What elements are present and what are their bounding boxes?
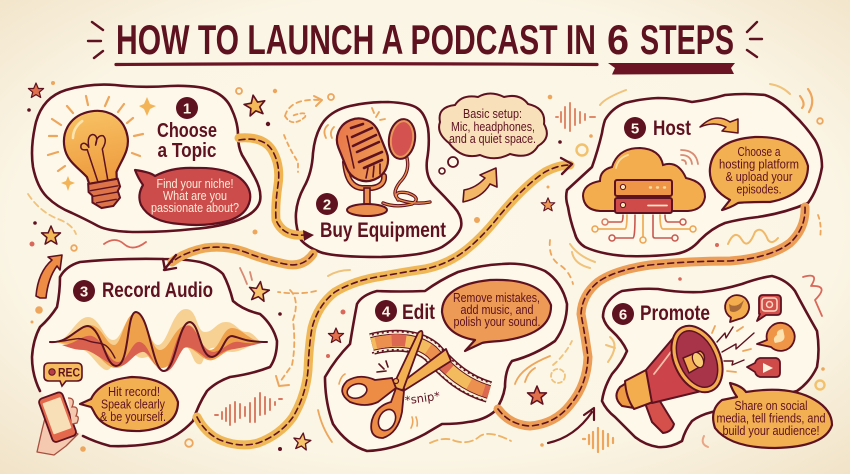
panel: step 6 promote xyxy=(612,295,832,448)
speech bubble: remove mistakes: add music, and xyxy=(460,303,534,317)
film strip xyxy=(372,332,491,401)
speech bubble: hit record: & be yourself. xyxy=(100,410,166,424)
icon: bird bubble xyxy=(725,295,749,322)
arrow: to thought bubble xyxy=(463,168,497,202)
heading: host: Host xyxy=(653,117,691,140)
panel 4 outline xyxy=(325,264,567,451)
title: STEPS xyxy=(640,16,734,63)
heading: promote: Promote xyxy=(640,302,710,325)
thought bubble: basic setup: and a quiet space. xyxy=(449,132,536,146)
panel: step 5 host xyxy=(583,117,808,243)
circuit lines xyxy=(607,215,681,238)
microphone cable xyxy=(383,158,430,206)
rec tag: REC xyxy=(58,366,80,380)
icon: hand holding phone xyxy=(37,391,78,455)
sound wave: below record audio xyxy=(215,393,282,425)
number badge 1: 1 xyxy=(183,100,191,118)
rays around bulb xyxy=(48,96,143,171)
number badge 4: 4 xyxy=(382,304,391,320)
rec tag xyxy=(44,363,82,386)
icon: megaphone xyxy=(616,318,733,433)
arrow: to host bubble xyxy=(700,118,738,133)
panel 3 outline xyxy=(32,259,277,446)
decorative stars and dots xyxy=(27,81,825,452)
icon: camera bubble xyxy=(757,295,781,321)
speech bubble: remove mistakes: Remove mistakes, xyxy=(453,291,540,305)
number badge 6 xyxy=(612,303,634,325)
heading: edit: Edit xyxy=(402,301,435,324)
thought bubble: basic setup: Mic, headphones, xyxy=(451,120,535,134)
number badge 6: 6 xyxy=(619,306,627,324)
speech bubble: remove mistakes: polish your sound. xyxy=(454,315,540,329)
speech bubble: hit record: Hit record! xyxy=(108,385,160,399)
title: 6 xyxy=(607,16,629,63)
number badge 3: 3 xyxy=(80,284,88,300)
speech bubble: find your niche: Find your niche! xyxy=(156,177,234,191)
speech bubble: choose a hosting platform: hosting platform xyxy=(719,158,799,172)
waveform xyxy=(50,309,267,372)
panel outlines xyxy=(32,85,822,451)
arrow: up to step 3 xyxy=(36,255,62,298)
number badge 5 xyxy=(624,117,646,139)
icon: light bulb xyxy=(59,106,139,213)
road: step 3 to step 5 xyxy=(197,158,572,445)
speech bubble: hit record xyxy=(80,377,178,431)
speech bubble: share on social: media, tell friends, and xyxy=(716,412,826,426)
speech bubble: find your niche: What are you xyxy=(163,189,227,203)
icon: microphone xyxy=(324,108,430,216)
pop filter xyxy=(386,117,418,161)
icon: video bubble xyxy=(747,358,780,377)
heading: choose a topic: a Topic xyxy=(158,140,216,162)
icon: scissors xyxy=(339,331,451,438)
lightning lines xyxy=(717,327,754,365)
sound wave: near step 2 bubble xyxy=(556,103,595,131)
speech bubble: choose a hosting platform: episodes. xyxy=(736,182,782,196)
speech bubble: hit record: Speak clearly xyxy=(101,398,166,412)
panel: step 2 buy equipment xyxy=(316,94,547,242)
heading: choose a topic xyxy=(157,120,217,162)
panel 5 outline xyxy=(566,94,822,256)
arrow: into step 6 xyxy=(548,408,594,443)
title: HOW TO LAUNCH A PODCAST IN xyxy=(116,16,596,63)
speech bubble: find your niche xyxy=(135,168,250,225)
panel: step 1 choose a topic xyxy=(48,96,250,225)
road: step 2 to step 3 xyxy=(163,247,313,270)
number badge 1 xyxy=(176,97,198,119)
speech bubble: choose a hosting platform xyxy=(710,137,808,210)
speech bubble: remove mistakes xyxy=(442,280,551,351)
road: step 1 to step 2 xyxy=(239,138,314,241)
number badge 2 xyxy=(316,193,338,215)
label: snip: *snip* xyxy=(404,389,441,407)
road: step 4 to step 5 and 6 xyxy=(498,207,805,426)
number badge 2: 2 xyxy=(323,196,331,214)
speech bubble: choose a hosting platform: Choose a xyxy=(738,145,781,159)
speech bubble: share on social xyxy=(713,383,832,448)
panel: step 4 edit xyxy=(339,280,551,438)
speech bubble: share on social: build your audience! xyxy=(722,424,820,438)
panel: step 3 record audio xyxy=(37,279,267,455)
thought bubble: basic setup xyxy=(439,94,547,174)
microphone head xyxy=(331,112,394,188)
speech bubble: choose a hosting platform: & upload your xyxy=(726,170,792,184)
icon: cloud with servers xyxy=(583,148,705,243)
panel 2 outline xyxy=(296,102,461,257)
thought bubble: basic setup: Basic setup: xyxy=(463,107,522,121)
panel 1 outline xyxy=(32,85,260,232)
short accent marks xyxy=(712,326,751,372)
heading: record audio: Record Audio xyxy=(102,279,213,302)
sparkles xyxy=(61,97,156,191)
icon: social bubble xyxy=(757,323,795,351)
decorative dashed trails and doodles xyxy=(28,84,822,447)
number badge 5: 5 xyxy=(631,120,639,138)
heading: choose a topic: Choose xyxy=(157,120,217,142)
sound wave: near promote xyxy=(583,428,613,452)
panel 6 outline xyxy=(602,276,818,447)
number badge 3 xyxy=(73,280,95,302)
number badge 4 xyxy=(375,300,397,322)
heading: buy equipment: Buy Equipment xyxy=(320,219,446,242)
speech bubble: find your niche: passionate about? xyxy=(151,201,239,215)
speech bubble: share on social: Share on social xyxy=(734,399,808,413)
